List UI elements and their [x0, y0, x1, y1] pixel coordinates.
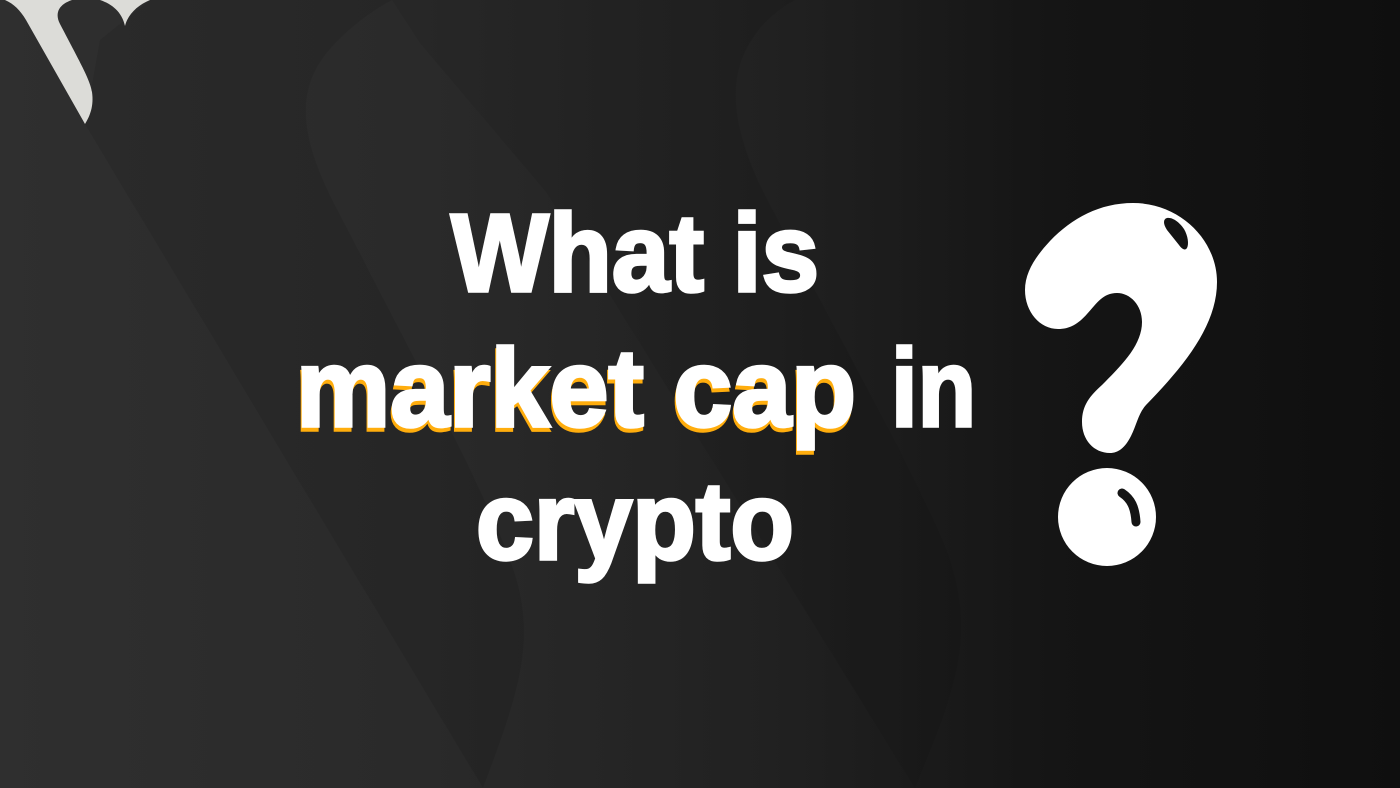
icon: question mark: [1025, 203, 1217, 566]
title line 2 highlight shadow: market cap: [295, 331, 855, 454]
question mark dot highlight: [1122, 493, 1136, 522]
title line 3: crypto: [476, 460, 794, 583]
background shape: first dark band: [85, 0, 524, 788]
title line 2 highlighted words: market cap: [296, 327, 856, 450]
title line 1: What is: [451, 192, 819, 315]
logo fragment: top-left V: [5, 0, 150, 124]
question mark top highlight: [1164, 218, 1188, 249]
background shape: second dark band: [392, 0, 961, 788]
title: [295, 192, 976, 583]
title line 2 end: in: [891, 327, 976, 450]
question mark hook: [1025, 203, 1217, 453]
question mark dot: [1058, 468, 1156, 566]
